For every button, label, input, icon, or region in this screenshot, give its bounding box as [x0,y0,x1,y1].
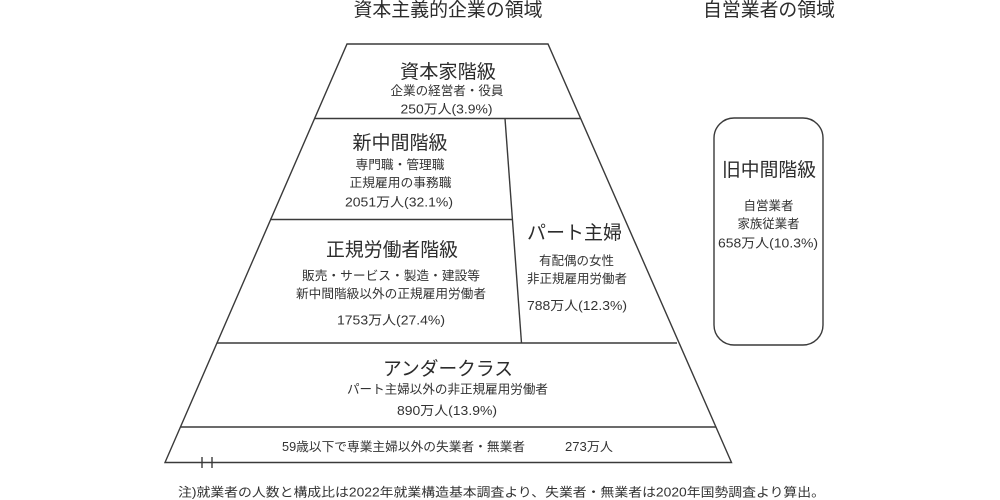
pyramid outline [165,44,732,462]
panel: old middle class: 658万人(10.3%) [718,236,818,250]
panel: part-time housewives: 788万人(12.3%) [527,298,627,313]
panel: underclass [347,358,548,418]
panel: part-time housewives: 有配偶の女性 [539,254,614,268]
panel: old middle class: 旧中間階級 [722,159,816,181]
panel: regular worker class: 1753万人(27.4%) [337,312,445,328]
heading: capitalist enterprise domain: 資本主義的企業の領域 [354,0,542,21]
panel: unemployed under 59 [282,439,614,454]
panel: capitalist class [390,61,504,116]
panel: old middle class: 自営業者 [744,198,794,213]
panel: unemployed under 59: 59歳以下で専業主婦以外の失業者・無業者 [282,439,525,454]
panel: regular worker class [296,239,486,328]
panel: underclass: アンダークラス [383,358,513,380]
panel: regular worker class: 正規労働者階級 [326,239,458,261]
panel: unemployed under 59: 273万人 [565,440,614,454]
panel: capitalist class: 企業の経営者・役員 [390,83,504,98]
panel: regular worker class: 新中間階級以外の正規雇用労働者 [296,286,486,301]
panel: part-time housewives [527,222,627,313]
panel: capitalist class: 資本家階級 [400,61,496,83]
panel: regular worker class: 販売・サービス・製造・建設等 [302,268,480,283]
panel: new middle class: 専門職・管理職 [356,157,445,172]
break marks on pyramid base [202,457,212,468]
panel: new middle class [345,132,453,210]
panel: underclass: パート主婦以外の非正規雇用労働者 [347,382,548,396]
panel: old middle class [714,118,823,345]
panel: new middle class: 正規雇用の事務職 [350,175,452,190]
panel: part-time housewives: 非正規雇用労働者 [527,271,627,286]
panel: old middle class: 家族従業者 [738,216,800,231]
panel: capitalist class: 250万人(3.9%) [400,102,492,116]
heading: self-employed domain: 自営業者の領域 [703,0,835,21]
panel: new middle class: 2051万人(32.1%) [345,194,453,210]
panel: underclass: 890万人(13.9%) [397,403,497,418]
panel: part-time housewives: パート主婦 [527,222,622,244]
panel: new middle class: 新中間階級 [352,132,448,154]
footnote: 注)就業者の人数と構成比は2022年就業構造基本調査より、失業者・無業者は2020年国勢調査より算出。 [178,484,825,500]
